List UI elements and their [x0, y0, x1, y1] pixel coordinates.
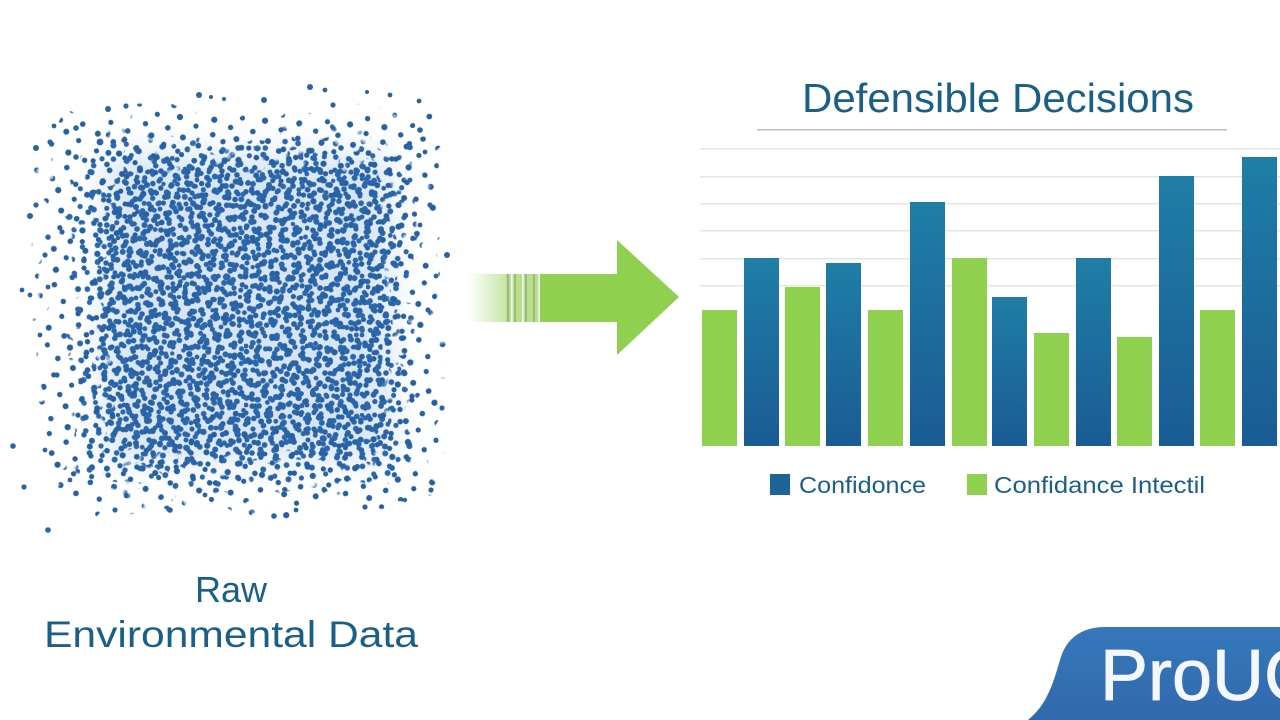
legend: Confidonce: [799, 472, 926, 498]
bar chart: [700, 148, 1280, 446]
label: raw environmental data: Environmental Data: [44, 614, 418, 655]
legend: [770, 472, 1205, 498]
logo tab: [1028, 627, 1280, 720]
title underline: [757, 129, 1227, 130]
label: raw environmental data: [44, 569, 418, 655]
chart title: Defensible Decisions: [802, 75, 1194, 121]
arrow: data to decisions: [468, 240, 679, 355]
scatter cloud: raw data points: [10, 84, 450, 533]
label: raw environmental data: Raw: [195, 569, 268, 610]
legend: Confidance Intectil: [994, 472, 1205, 498]
